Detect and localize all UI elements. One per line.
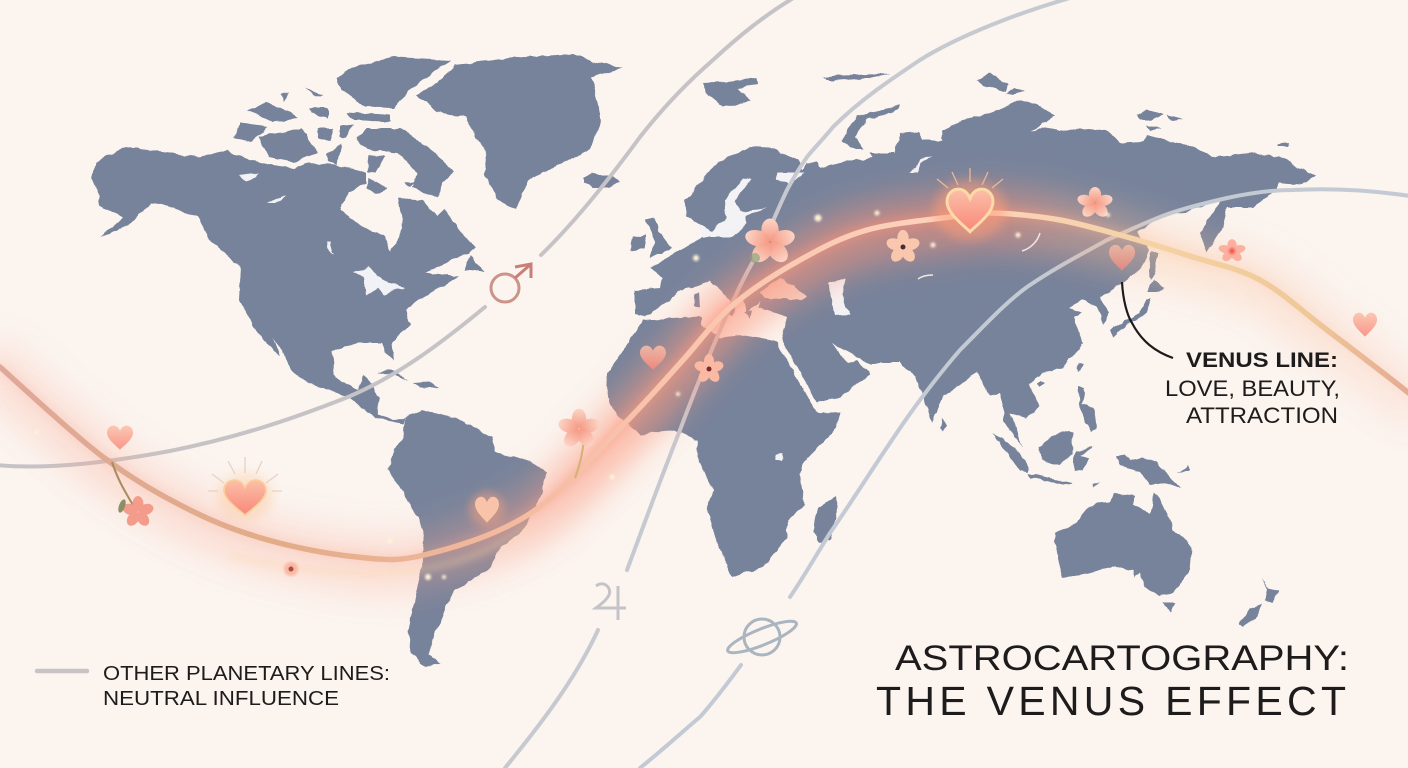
title: THE VENUS EFFECT	[876, 678, 1346, 724]
Mediterranean islands	[694, 293, 752, 318]
Arctic Canada islands	[234, 57, 484, 272]
Venus line	[0, 213, 1408, 560]
callout: Venus line label	[1165, 349, 1340, 428]
callout: Venus line label: ATTRACTION	[1186, 403, 1338, 428]
icon: Saturn symbol	[725, 616, 799, 658]
small light arcs	[918, 233, 1040, 279]
Australia	[1055, 492, 1192, 595]
flower: Central Asia	[885, 230, 921, 264]
Saturn line	[640, 189, 1408, 768]
flower: small	[284, 562, 298, 576]
heart: Pacific west	[107, 426, 133, 450]
icon: Mars symbol	[491, 264, 531, 302]
legend: other planetary lines: OTHER PLANETARY LINES:	[103, 663, 390, 685]
secondary golden arc under the Venus line	[230, 525, 530, 573]
Mars line	[0, 0, 795, 467]
icon: Jupiter symbol	[596, 584, 626, 620]
Canada lakes	[239, 172, 405, 295]
heart: large on Venus line with rays	[934, 168, 1006, 240]
heart: East Asia	[1109, 245, 1135, 271]
title: ASTROCARTOGRAPHY:	[895, 639, 1349, 678]
heart: North Pacific	[1353, 313, 1377, 337]
callout: Venus line label: VENUS LINE:	[1186, 349, 1338, 372]
world map	[92, 54, 1315, 667]
flower: Pacific	[117, 496, 155, 528]
Tasmania	[1163, 603, 1175, 614]
flower: Sahara	[693, 354, 725, 384]
legend: other planetary lines	[37, 663, 390, 710]
Venus line glow	[0, 213, 1408, 584]
flower: South Atlantic	[556, 409, 602, 449]
sparkles	[35, 210, 1110, 580]
Eurasia	[635, 100, 1315, 447]
Southeast Asia islands	[940, 362, 1190, 489]
Africa	[607, 317, 841, 577]
Jupiter line	[505, 0, 1080, 768]
Madagascar	[813, 495, 838, 543]
Britain and Ireland	[630, 218, 672, 258]
legend: other planetary lines: NEUTRAL INFLUENCE	[103, 688, 339, 710]
New Zealand	[1238, 578, 1279, 627]
Japan and Sakhalin	[1110, 250, 1165, 337]
heart: South Pacific with rays	[208, 457, 282, 521]
flower: Siberia	[1076, 187, 1114, 219]
callout: Venus line label: LOVE, BEAUTY,	[1165, 376, 1340, 401]
Cuba and Caribbean	[377, 370, 440, 388]
flower stems	[112, 440, 584, 505]
heart: Northwest Africa	[640, 346, 666, 370]
Iceland	[584, 173, 619, 188]
African lakes	[775, 453, 782, 460]
inland seas	[697, 157, 932, 316]
callout leader line	[1122, 282, 1173, 358]
title	[876, 639, 1349, 724]
North America	[92, 147, 475, 424]
South America	[388, 410, 547, 667]
flower: Sea of Japan east	[1217, 239, 1247, 263]
heart: Brazil	[469, 491, 505, 527]
Greenland	[416, 54, 623, 210]
flower: Eastern Europe	[743, 218, 797, 266]
Arctic islands	[703, 72, 1289, 148]
